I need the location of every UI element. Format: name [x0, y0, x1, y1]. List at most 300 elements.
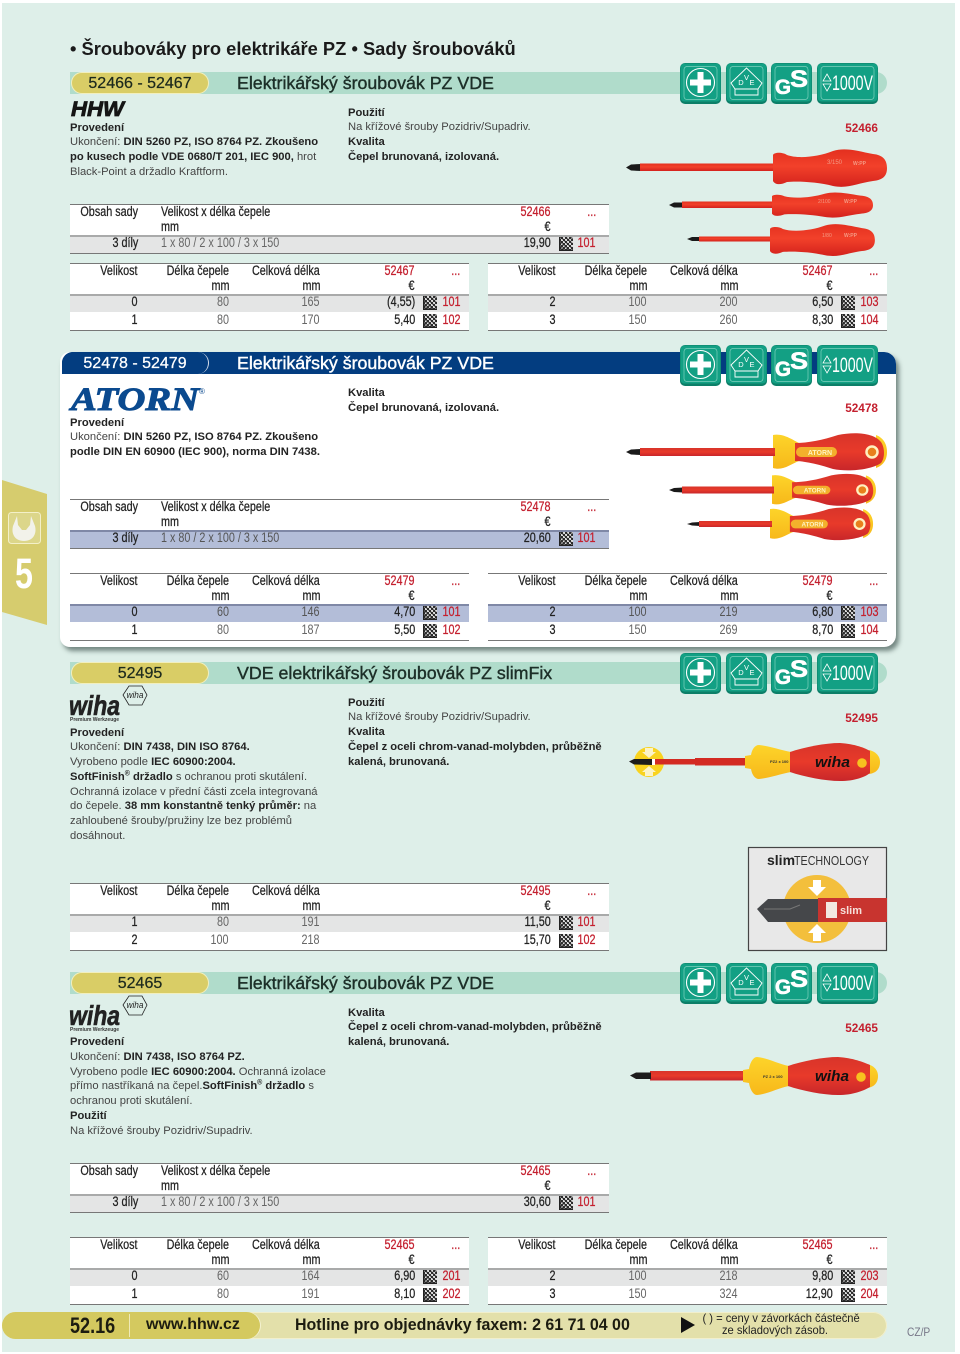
icons: safety marks 52478: V: [744, 355, 749, 364]
row size 2: 2: [550, 604, 556, 619]
text: provedení 52465: Použití: [70, 1110, 107, 1122]
product image: red screwdriver set 52466: 2/100: [818, 199, 831, 205]
set table header: ...: [587, 499, 596, 514]
table header: mm: [629, 588, 647, 603]
set table row: 101: [578, 1194, 596, 1209]
chapter tab 5: [2, 480, 47, 625]
text: provedení 52465: ochranou proti skutálení.: [70, 1095, 193, 1107]
set table header: €: [545, 219, 551, 234]
table header: 52495: [521, 883, 551, 898]
row size 0: 0: [132, 294, 138, 309]
logo: HHW: HHW: [71, 98, 126, 121]
row size 2: 6,80: [812, 604, 833, 619]
row size 0: 60: [217, 604, 229, 619]
table header: mm: [211, 588, 229, 603]
table header: Celková délka: [252, 883, 320, 898]
slimTECHNOLOGY box: slim: [840, 905, 862, 917]
set table header: mm: [161, 1178, 179, 1193]
text: použití a kvalita 52466: Kvalita: [348, 136, 385, 148]
row size 2: 100: [629, 1268, 647, 1283]
text: provedení 52465: Provedení: [70, 1036, 124, 1048]
arrow: [681, 1317, 695, 1333]
text: použití a kvalita 52466: [348, 106, 531, 163]
table header: Celková délka: [670, 263, 738, 278]
row size 2: 103: [861, 604, 879, 619]
product image: red screwdriver set 52466: W:PP: [853, 161, 867, 167]
hotline: Hotline pro objednávky faxem: 2 61 71 04 00: [295, 1315, 630, 1334]
row size 1: 187: [302, 622, 320, 637]
product image: red screwdriver set 52466: 1/80: [822, 233, 832, 239]
row size 1: 1: [132, 312, 138, 327]
table header: mm: [302, 1252, 320, 1267]
section 52495 number pill: 52495: [118, 665, 162, 682]
logo: wiha 52495: wiha: [126, 690, 144, 700]
table header: Velikost: [101, 263, 138, 278]
row size 1: 191: [302, 914, 320, 929]
table header: mm: [302, 898, 320, 913]
product image: wiha screwdriver 52465: PZ 2 x 100: [763, 1074, 783, 1079]
row size 1: 191: [302, 1286, 320, 1301]
table header: 52479: [385, 573, 415, 588]
row size 3: 104: [861, 622, 879, 637]
table header: €: [409, 1252, 415, 1267]
icons: safety marks 52495: V: [744, 663, 749, 672]
row size 2: 100: [629, 604, 647, 619]
set table row: 3 díly: [112, 235, 138, 250]
table header: ...: [869, 573, 878, 588]
section 52465 header band: [70, 972, 887, 994]
text: provedení 52465: Vyrobeno podle IEC 60900:2004. Ochranná izolace: [70, 1066, 326, 1078]
table: 52467 sizes 0-1: [70, 263, 469, 331]
table header: €: [827, 588, 833, 603]
text: kvalita 52478: Čepel brunovaná, izolovaná.: [348, 402, 499, 414]
row size 0: 80: [217, 294, 229, 309]
slimTECHNOLOGY box: slim: [767, 852, 795, 868]
set table row: 30,60: [524, 1194, 551, 1209]
row size 0: [70, 1268, 469, 1286]
row size 0: 101: [443, 604, 461, 619]
table header: 52465: [385, 1237, 415, 1252]
section 52495 number pill: [71, 662, 209, 684]
text: provedení 52478: Provedení: [70, 416, 124, 428]
table header: mm: [629, 278, 647, 293]
table: 52479 sizes 2-3: [488, 573, 887, 641]
product image: ATORN screwdriver set 52478: ATORN: [802, 522, 824, 529]
row size 1: 102: [443, 312, 461, 327]
product number 52465: 52465: [845, 1021, 878, 1035]
product image: ATORN screwdriver set 52478: [626, 433, 887, 540]
product image: ATORN screwdriver set 52478: ATORN: [808, 450, 832, 457]
blue header band: [62, 352, 896, 374]
row size 1: 80: [217, 914, 229, 929]
row size 1: 1: [132, 914, 138, 929]
text: provedení 52495: SoftFinish® držadlo s ochranou proti skutálení.: [70, 770, 307, 783]
row size 3: 150: [629, 1286, 647, 1301]
row size 1: 101: [578, 914, 596, 929]
section 52466-52467 number pill: 52466 - 52467: [88, 75, 192, 92]
text: provedení 52465: přímo nastříkaná na čepel.SoftFinish® držadlo s: [70, 1080, 314, 1092]
row size 0: 165: [302, 294, 320, 309]
text: kvalita 52465: Čepel z oceli chrom-vanad-molybden, průběžně: [348, 1021, 602, 1033]
panel: ATORN 52478-52479: [60, 352, 896, 647]
logo: wiha 52465: [69, 996, 147, 1033]
set table header: Obsah sady: [80, 1163, 138, 1178]
table header: 52467: [803, 263, 833, 278]
product image: red screwdriver set 52466: [626, 149, 887, 256]
catalogue code: CZ/P: [907, 1325, 930, 1339]
text: provedení 52465: Ukončení: DIN 7438, ISO 8764 PZ.: [70, 1051, 245, 1063]
icons: safety marks 52466: E: [749, 78, 755, 87]
icons: safety marks 52466: V: [744, 73, 749, 82]
row size 3: 8,70: [812, 622, 833, 637]
row size 1: 202: [443, 1286, 461, 1301]
text: provedení 52495: Ochranná izolace v přední části zcela integrovaná: [70, 786, 318, 798]
row size 2: [488, 1268, 887, 1286]
section 52495 heading: VDE elektrikářský šroubovák PZ slimFix: [237, 663, 552, 683]
table: set 52465: [70, 1163, 609, 1213]
set table header: [80, 1163, 596, 1193]
icons: safety marks 52465: D: [738, 978, 744, 987]
set table header: 52466: [521, 204, 551, 219]
row size 2: [132, 932, 596, 948]
table header: Délka čepele: [167, 263, 229, 278]
page number: 52.16: [70, 1313, 115, 1338]
set table row: [70, 235, 609, 253]
row size 1: 5,50: [394, 622, 415, 637]
footer bar: [2, 1312, 887, 1339]
table header: ...: [587, 883, 596, 898]
row size 1: 80: [217, 622, 229, 637]
table header: [100, 263, 460, 293]
product number 52466: 52466: [845, 121, 878, 135]
text: použití a kvalita 52495: Čepel z oceli chrom-vanad-molybden, průběžně: [348, 741, 602, 753]
table header: Celková délka: [670, 573, 738, 588]
table header: mm: [211, 1252, 229, 1267]
row size 2: 100: [629, 294, 647, 309]
set table row: 3 díly: [112, 530, 138, 545]
table: 52465 sizes 2-3: [488, 1237, 887, 1305]
row size 2: 200: [720, 294, 738, 309]
logo: wiha 52465: wiha: [126, 1000, 144, 1010]
table: set 52466: [70, 204, 609, 254]
product image: red screwdriver set 52466: W:PP: [844, 233, 858, 239]
note: [702, 1311, 860, 1336]
set table row: [70, 1194, 609, 1212]
website: www.hhw.cz: [146, 1316, 240, 1333]
row size 1: 80: [217, 312, 229, 327]
table header: ...: [869, 263, 878, 278]
text: provedení 52466: Provedení: [70, 122, 124, 134]
text: provedení 52465: Na křížové šrouby Pozidriv/Supadriv.: [70, 1124, 253, 1136]
row size 0: 0: [132, 1268, 138, 1283]
table: 52465 sizes 0-1: [70, 1237, 469, 1305]
icons: safety marks 52478: D: [738, 360, 744, 369]
logo: ATORN: ®: [199, 387, 205, 396]
row size 3: 104: [861, 312, 879, 327]
row size 3: 269: [720, 622, 738, 637]
table header: Velikost: [101, 573, 138, 588]
table header: €: [409, 278, 415, 293]
icons: safety marks 52465: G: [775, 976, 791, 999]
section 52466-52467 header band: [70, 72, 887, 94]
icons: safety marks 52495: G: [775, 666, 791, 689]
table header: 52479: [803, 573, 833, 588]
row size 3: 150: [629, 312, 647, 327]
row size 2: 100: [211, 932, 229, 947]
row size 2: 6,50: [812, 294, 833, 309]
text: kvalita 52478: [348, 387, 499, 414]
set table header: €: [545, 514, 551, 529]
row size 2: 219: [720, 604, 738, 619]
row size 3: 12,90: [806, 1286, 833, 1301]
set table row: 1 x 80 / 2 x 100 / 3 x 150: [161, 235, 279, 250]
row size 3: 204: [861, 1286, 879, 1301]
icons: safety marks 52466: S: [790, 66, 808, 93]
logo: wiha 52495: Premium Werkzeuge: [70, 717, 119, 723]
row size 0: 6,90: [394, 1268, 415, 1283]
set table row: 101: [578, 235, 596, 250]
row size 2: 2: [550, 294, 556, 309]
title: • Šroubováky pro elektrikáře PZ • Sady šroubováků: [70, 38, 516, 59]
icons: safety marks 52478: E: [749, 360, 755, 369]
row size 3: [550, 622, 879, 638]
row size 3: 260: [720, 312, 738, 327]
logo: wiha 52465: wiha: [69, 1000, 120, 1031]
set table header: [80, 499, 596, 529]
table header: Délka čepele: [167, 573, 229, 588]
table header: ...: [451, 263, 460, 278]
text: provedení 52495: dosáhnout.: [70, 830, 125, 842]
section 52466-52467 number pill: [71, 72, 209, 94]
separator: [129, 1314, 130, 1337]
text: kvalita 52478: Kvalita: [348, 387, 385, 399]
table header: mm: [720, 278, 738, 293]
number pill: [62, 352, 209, 374]
section 52466-52467 heading: Elektrikářský šroubovák PZ VDE: [237, 73, 494, 93]
row size 0: [70, 294, 469, 312]
slimTECHNOLOGY box: TECHNOLOGY: [794, 853, 869, 868]
text: provedení 52478: podle DIN EN 60900 (IEC 900), norma DIN 7438.: [70, 446, 320, 458]
row size 1: [70, 914, 609, 932]
section 52465 number pill: 52465: [118, 975, 162, 992]
row size 3: 8,30: [812, 312, 833, 327]
table header: mm: [302, 278, 320, 293]
row size 3: 3: [550, 1286, 556, 1301]
row size 0: 4,70: [394, 604, 415, 619]
text: použití a kvalita 52495: Použití: [348, 696, 385, 708]
product image: red screwdriver set 52466: 3/150: [827, 160, 843, 166]
set table header: ...: [587, 1163, 596, 1178]
icons: safety marks 52495: S: [790, 656, 808, 683]
row size 1: 80: [217, 1286, 229, 1301]
row size 2: 15,70: [524, 932, 551, 947]
set table header: Velikost x délka čepele: [161, 204, 270, 219]
table: set 52478: [70, 499, 609, 549]
icons: safety marks 52466: 1000V: [832, 72, 873, 95]
set table header: 52465: [521, 1163, 551, 1178]
table: 52495: [70, 883, 609, 951]
text: použití a kvalita 52495: Kvalita: [348, 726, 385, 738]
table header: 52465: [803, 1237, 833, 1252]
product number 52495: 52495: [845, 711, 878, 725]
table header: €: [827, 1252, 833, 1267]
product image: wiha screwdriver 52465: wiha: [815, 1068, 849, 1085]
table header: mm: [629, 1252, 647, 1267]
set table header: Obsah sady: [80, 499, 138, 514]
logo: ATORN: ATORN: [69, 382, 200, 418]
row size 1: 1: [132, 622, 138, 637]
row size 2: 9,80: [812, 1268, 833, 1283]
note: ( ) = ceny v závorkách částečně: [702, 1311, 860, 1325]
text: provedení 52465: [70, 1036, 326, 1136]
set table row: 1 x 80 / 2 x 100 / 3 x 150: [161, 1194, 279, 1209]
icons: safety marks 52478: G: [775, 358, 791, 381]
row size 1: [132, 622, 461, 638]
row size 2: [488, 294, 887, 312]
text: kvalita 52465: kalená, brunovaná.: [348, 1036, 449, 1048]
table header: €: [409, 588, 415, 603]
row size 1: 170: [302, 312, 320, 327]
table header: Délka čepele: [167, 1237, 229, 1252]
row size 0: 60: [217, 1268, 229, 1283]
table header: Velikost: [101, 1237, 138, 1252]
set table header: 52478: [521, 499, 551, 514]
table header: 52467: [385, 263, 415, 278]
product image: wiha slimFix screwdriver 52495: [629, 743, 880, 781]
table header: Velikost: [519, 573, 556, 588]
product image: red screwdriver set 52466: W:PP: [844, 199, 858, 205]
table header: Velikost: [101, 883, 138, 898]
row size 3: 3: [550, 312, 556, 327]
product image: wiha slimFix screwdriver 52495: wiha: [815, 754, 850, 771]
text: provedení 52466: [70, 122, 318, 178]
row size 0: (4,55): [387, 294, 415, 309]
row size 0: 201: [443, 1268, 461, 1283]
row size 2: 2: [132, 932, 138, 947]
icons: safety marks 52466: D: [738, 78, 744, 87]
set table header: Velikost x délka čepele: [161, 1163, 270, 1178]
text: použití a kvalita 52466: Na křížové šrouby Pozidriv/Supadriv.: [348, 121, 531, 133]
table header: [518, 573, 878, 603]
table header: [100, 573, 460, 603]
text: provedení 52495: Vyrobeno podle IEC 60900:2004.: [70, 756, 236, 768]
row size 0: 146: [302, 604, 320, 619]
text: provedení 52466: Black-Point a držadlo Kraftform.: [70, 166, 228, 178]
row size 2: 218: [302, 932, 320, 947]
text: provedení 52495: Provedení: [70, 726, 124, 738]
row size 2: [488, 604, 887, 622]
row size 3: 150: [629, 622, 647, 637]
text: provedení 52478: Ukončení: DIN 5260 PZ, ISO 8764 PZ. Zkoušeno: [70, 431, 318, 443]
icons: safety marks 52495: D: [738, 668, 744, 677]
icons: safety marks 52465: 1000V: [832, 972, 873, 995]
icons: safety marks 52465: S: [790, 966, 808, 993]
section 52495 header band: [70, 662, 887, 684]
row size 1: 102: [443, 622, 461, 637]
product image: ATORN screwdriver set 52478: ATORN: [804, 488, 826, 495]
set table row: 19,90: [524, 235, 551, 250]
icons: safety marks 52495: [680, 653, 878, 694]
set table header: Velikost x délka čepele: [161, 499, 270, 514]
row size 2: 2: [550, 1268, 556, 1283]
table header: mm: [720, 588, 738, 603]
set table header: [80, 204, 596, 234]
set table header: mm: [161, 219, 179, 234]
row size 1: 8,10: [394, 1286, 415, 1301]
set table header: €: [545, 1178, 551, 1193]
table header: mm: [720, 1252, 738, 1267]
row size 3: [550, 312, 879, 328]
text: použití a kvalita 52466: Čepel brunovaná, izolovaná.: [348, 151, 499, 163]
table header: ...: [451, 1237, 460, 1252]
table header: Celková délka: [670, 1237, 738, 1252]
logo: wiha 52465: Premium Werkzeuge: [70, 1027, 119, 1033]
icons: safety marks 52495: 1000V: [832, 662, 873, 685]
text: kvalita 52465: [348, 1006, 602, 1048]
text: provedení 52495: Ukončení: DIN 7438, DIN ISO 8764.: [70, 741, 250, 753]
text: provedení 52495: do čepele. 38 mm konstantně tenký průměr: na: [70, 800, 316, 812]
icons: safety marks 52495: E: [749, 668, 755, 677]
table header: Celková délka: [252, 1237, 320, 1252]
note: ze skladových zásob.: [722, 1322, 828, 1336]
table header: [100, 1237, 460, 1267]
row size 0: 0: [132, 604, 138, 619]
slimTECHNOLOGY box: [748, 848, 887, 950]
text: provedení 52466: po kusech podle VDE 0680/T 201, IEC 900, hrot: [70, 151, 316, 163]
table header: mm: [302, 588, 320, 603]
set table header: ...: [587, 204, 596, 219]
row size 1: 1: [132, 1286, 138, 1301]
table header: Délka čepele: [585, 573, 647, 588]
row size 0: [70, 604, 469, 622]
table header: Celková délka: [252, 573, 320, 588]
table header: ...: [451, 573, 460, 588]
row size 3: 3: [550, 622, 556, 637]
chapter tab 5: 5: [15, 551, 33, 598]
row size 2: 203: [861, 1268, 879, 1283]
icons: safety marks 52465: [680, 963, 878, 1004]
text: provedení 52495: zahloubené šrouby/pružiny lze bez problémů: [70, 815, 292, 827]
table header: Délka čepele: [167, 883, 229, 898]
row size 1: [132, 312, 461, 328]
text: kvalita 52465: Kvalita: [348, 1006, 385, 1018]
table header: Velikost: [519, 263, 556, 278]
text: provedení 52466: Ukončení: DIN 5260 PZ, ISO 8764 PZ. Zkoušeno: [70, 136, 318, 148]
table header: €: [827, 278, 833, 293]
logo: wiha 52495: [69, 686, 147, 723]
table header: [100, 883, 596, 913]
table header: Délka čepele: [585, 263, 647, 278]
table: 52479 sizes 0-1: [70, 573, 469, 641]
set table row: 1 x 80 / 2 x 100 / 3 x 150: [161, 530, 279, 545]
row size 3: [550, 1286, 879, 1302]
table header: mm: [211, 898, 229, 913]
logo: wiha 52495: wiha: [69, 690, 120, 721]
icons: safety marks 52478: 1000V: [832, 354, 873, 377]
set table row: 3 díly: [112, 1194, 138, 1209]
table header: Velikost: [519, 1237, 556, 1252]
table header: [518, 263, 878, 293]
icons: safety marks 52466: [680, 63, 878, 104]
row size 0: 101: [443, 294, 461, 309]
product image: wiha screwdriver 52465: [630, 1057, 878, 1095]
text: použití a kvalita 52495: [348, 696, 602, 768]
table: 52467 sizes 2-3: [488, 263, 887, 331]
text: provedení 52495: [70, 726, 318, 842]
table header: [518, 1237, 878, 1267]
row size 3: 324: [720, 1286, 738, 1301]
set table row: 20,60: [524, 530, 551, 545]
